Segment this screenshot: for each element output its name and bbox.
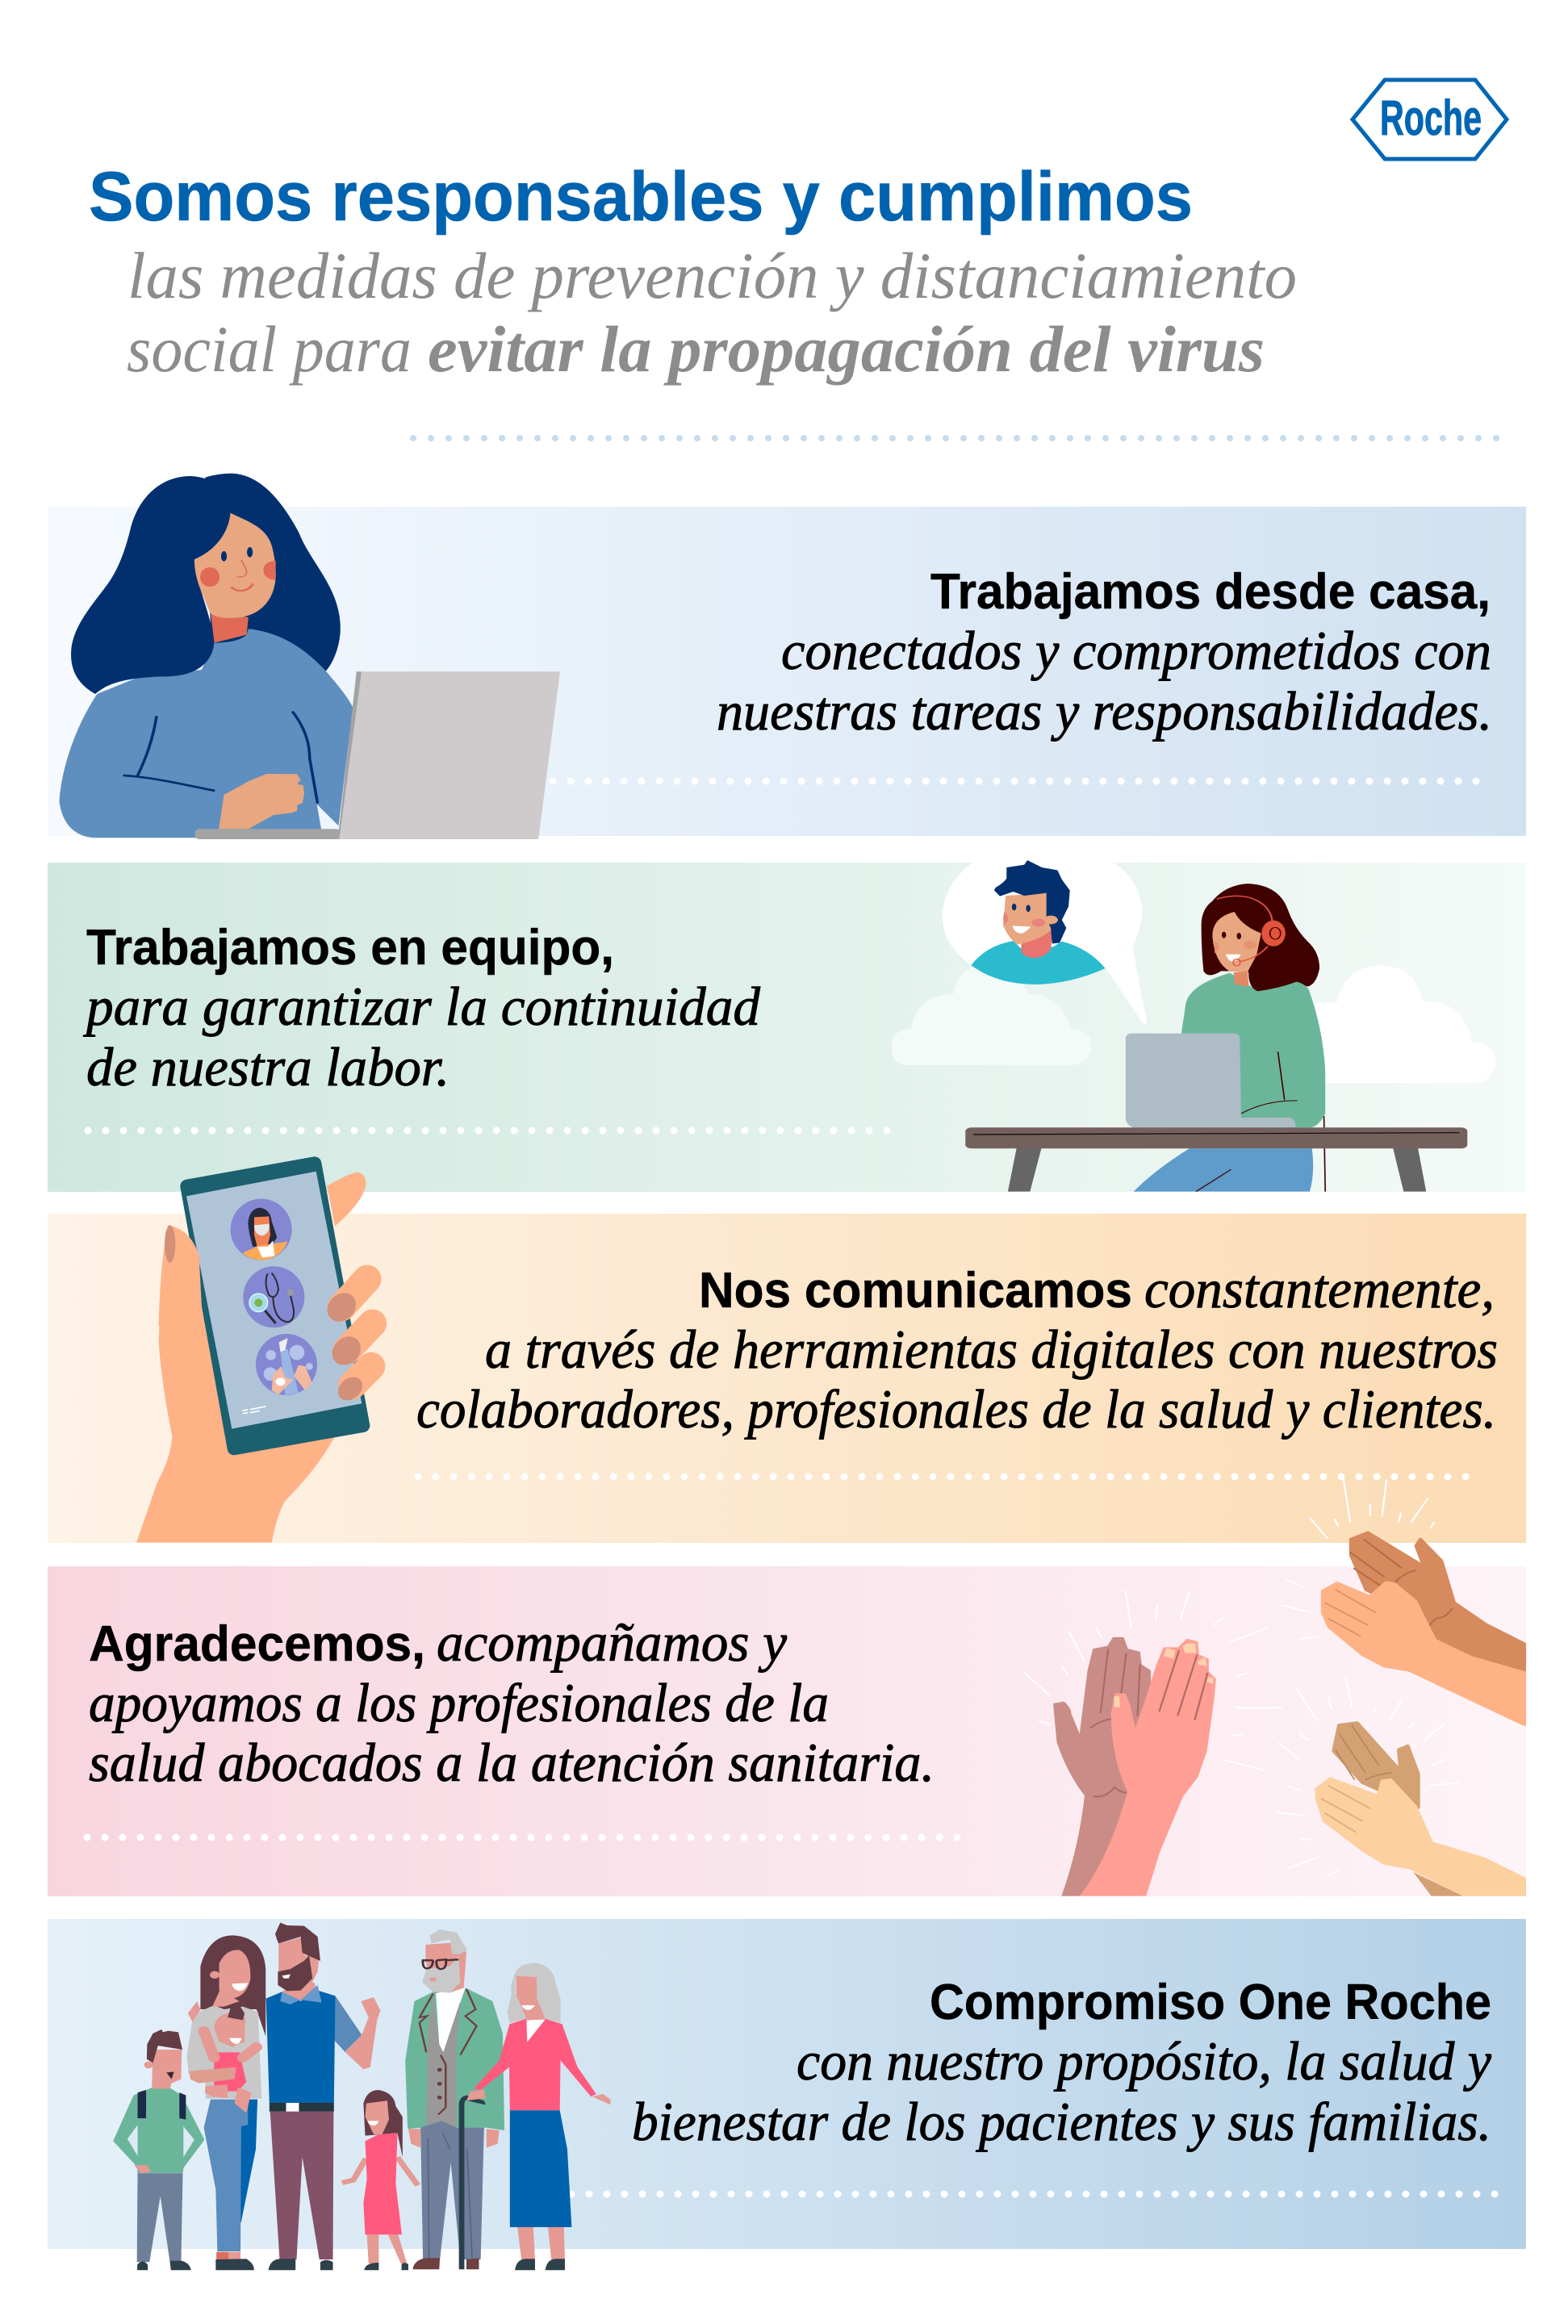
text: trabajamos en equipo: Trabajamos en equipo, [86, 920, 614, 976]
father [266, 1923, 380, 2270]
applause rays [1024, 1478, 1459, 1875]
mother and baby [187, 1935, 266, 2270]
subtitle [127, 239, 1297, 386]
cane [459, 2096, 486, 2269]
grandmother [474, 1963, 610, 2270]
screen item: doctor with mask [231, 1199, 292, 1260]
illustration: clapping hands [1024, 1478, 1526, 1896]
text: trabajamos desde casa: nuestras tareas y responsabilidades. [717, 680, 1492, 742]
logo: Roche hexagon: Roche [1380, 90, 1482, 145]
dark hand pair, left [1053, 1637, 1151, 1896]
fingers [321, 1279, 373, 1405]
title: Somos responsables y cumplimos [89, 158, 1193, 236]
brown hand pair, top right [1351, 1532, 1524, 1670]
text: compromiso One Roche: con nuestro propósito, la salud y [797, 2030, 1492, 2092]
text: trabajamos desde casa: Trabajamos desde casa, [930, 564, 1491, 620]
screen item: stethoscope and virus [243, 1266, 304, 1327]
text: trabajamos en equipo [83, 920, 761, 1097]
illustration: hand with phone [136, 1164, 373, 1543]
subtitle: social para [127, 312, 412, 386]
text: compromiso One Roche [632, 1975, 1492, 2152]
logo: Roche hexagon [1353, 80, 1507, 159]
panel 1: trabajamos desde casa [48, 474, 1526, 839]
text: agradecemos: salud abocados a la atención sanitaria. [89, 1732, 935, 1793]
text: nos comunicamos: Nos comunicamos [699, 1263, 1132, 1319]
subtitle: evitar la propagación del virus [428, 312, 1265, 386]
text: agradecemos [89, 1611, 935, 1793]
screen item: washing hands [256, 1334, 317, 1395]
text: nos comunicamos [416, 1258, 1498, 1440]
panel 4: agradecemos [48, 1478, 1526, 1896]
text: compromiso One Roche: bienestar de los pacientes y sus familias. [632, 2091, 1491, 2152]
illustration: video call [892, 860, 1495, 1192]
panel 5: compromiso One Roche [48, 1919, 1526, 2270]
text: agradecemos: acompañamos y [437, 1611, 788, 1673]
text: nos comunicamos: colaboradores, profesionales de la salud y clientes. [416, 1378, 1496, 1440]
text: nos comunicamos: a través de herramientas digitales con nuestros [485, 1319, 1498, 1380]
text: agradecemos: Agradecemos, [89, 1616, 425, 1672]
illustration: family [113, 1923, 610, 2270]
illustration: woman at laptop [59, 474, 560, 839]
text: nos comunicamos: constantemente, [1144, 1258, 1495, 1319]
panel 3: nos comunicamos [48, 1164, 1526, 1543]
text: trabajamos desde casa [717, 564, 1492, 742]
panel 2: trabajamos en equipo [48, 860, 1526, 1192]
text: compromiso One Roche: Compromiso One Roche [930, 1975, 1491, 2030]
subtitle: las medidas de prevención y distanciamiento [128, 239, 1297, 312]
text: trabajamos desde casa: conectados y comprometidos con [781, 620, 1491, 681]
screen caption marks [242, 1407, 266, 1414]
text: trabajamos en equipo: para garantizar la continuidad [83, 976, 761, 1037]
text: agradecemos: apoyamos a los profesionales de la [89, 1672, 829, 1733]
grandfather [405, 1929, 504, 2269]
girl [342, 2090, 418, 2270]
text: trabajamos en equipo: de nuestra labor. [86, 1036, 449, 1097]
tan hand pair, bottom right [1334, 1723, 1418, 1808]
boy [113, 2029, 204, 2270]
